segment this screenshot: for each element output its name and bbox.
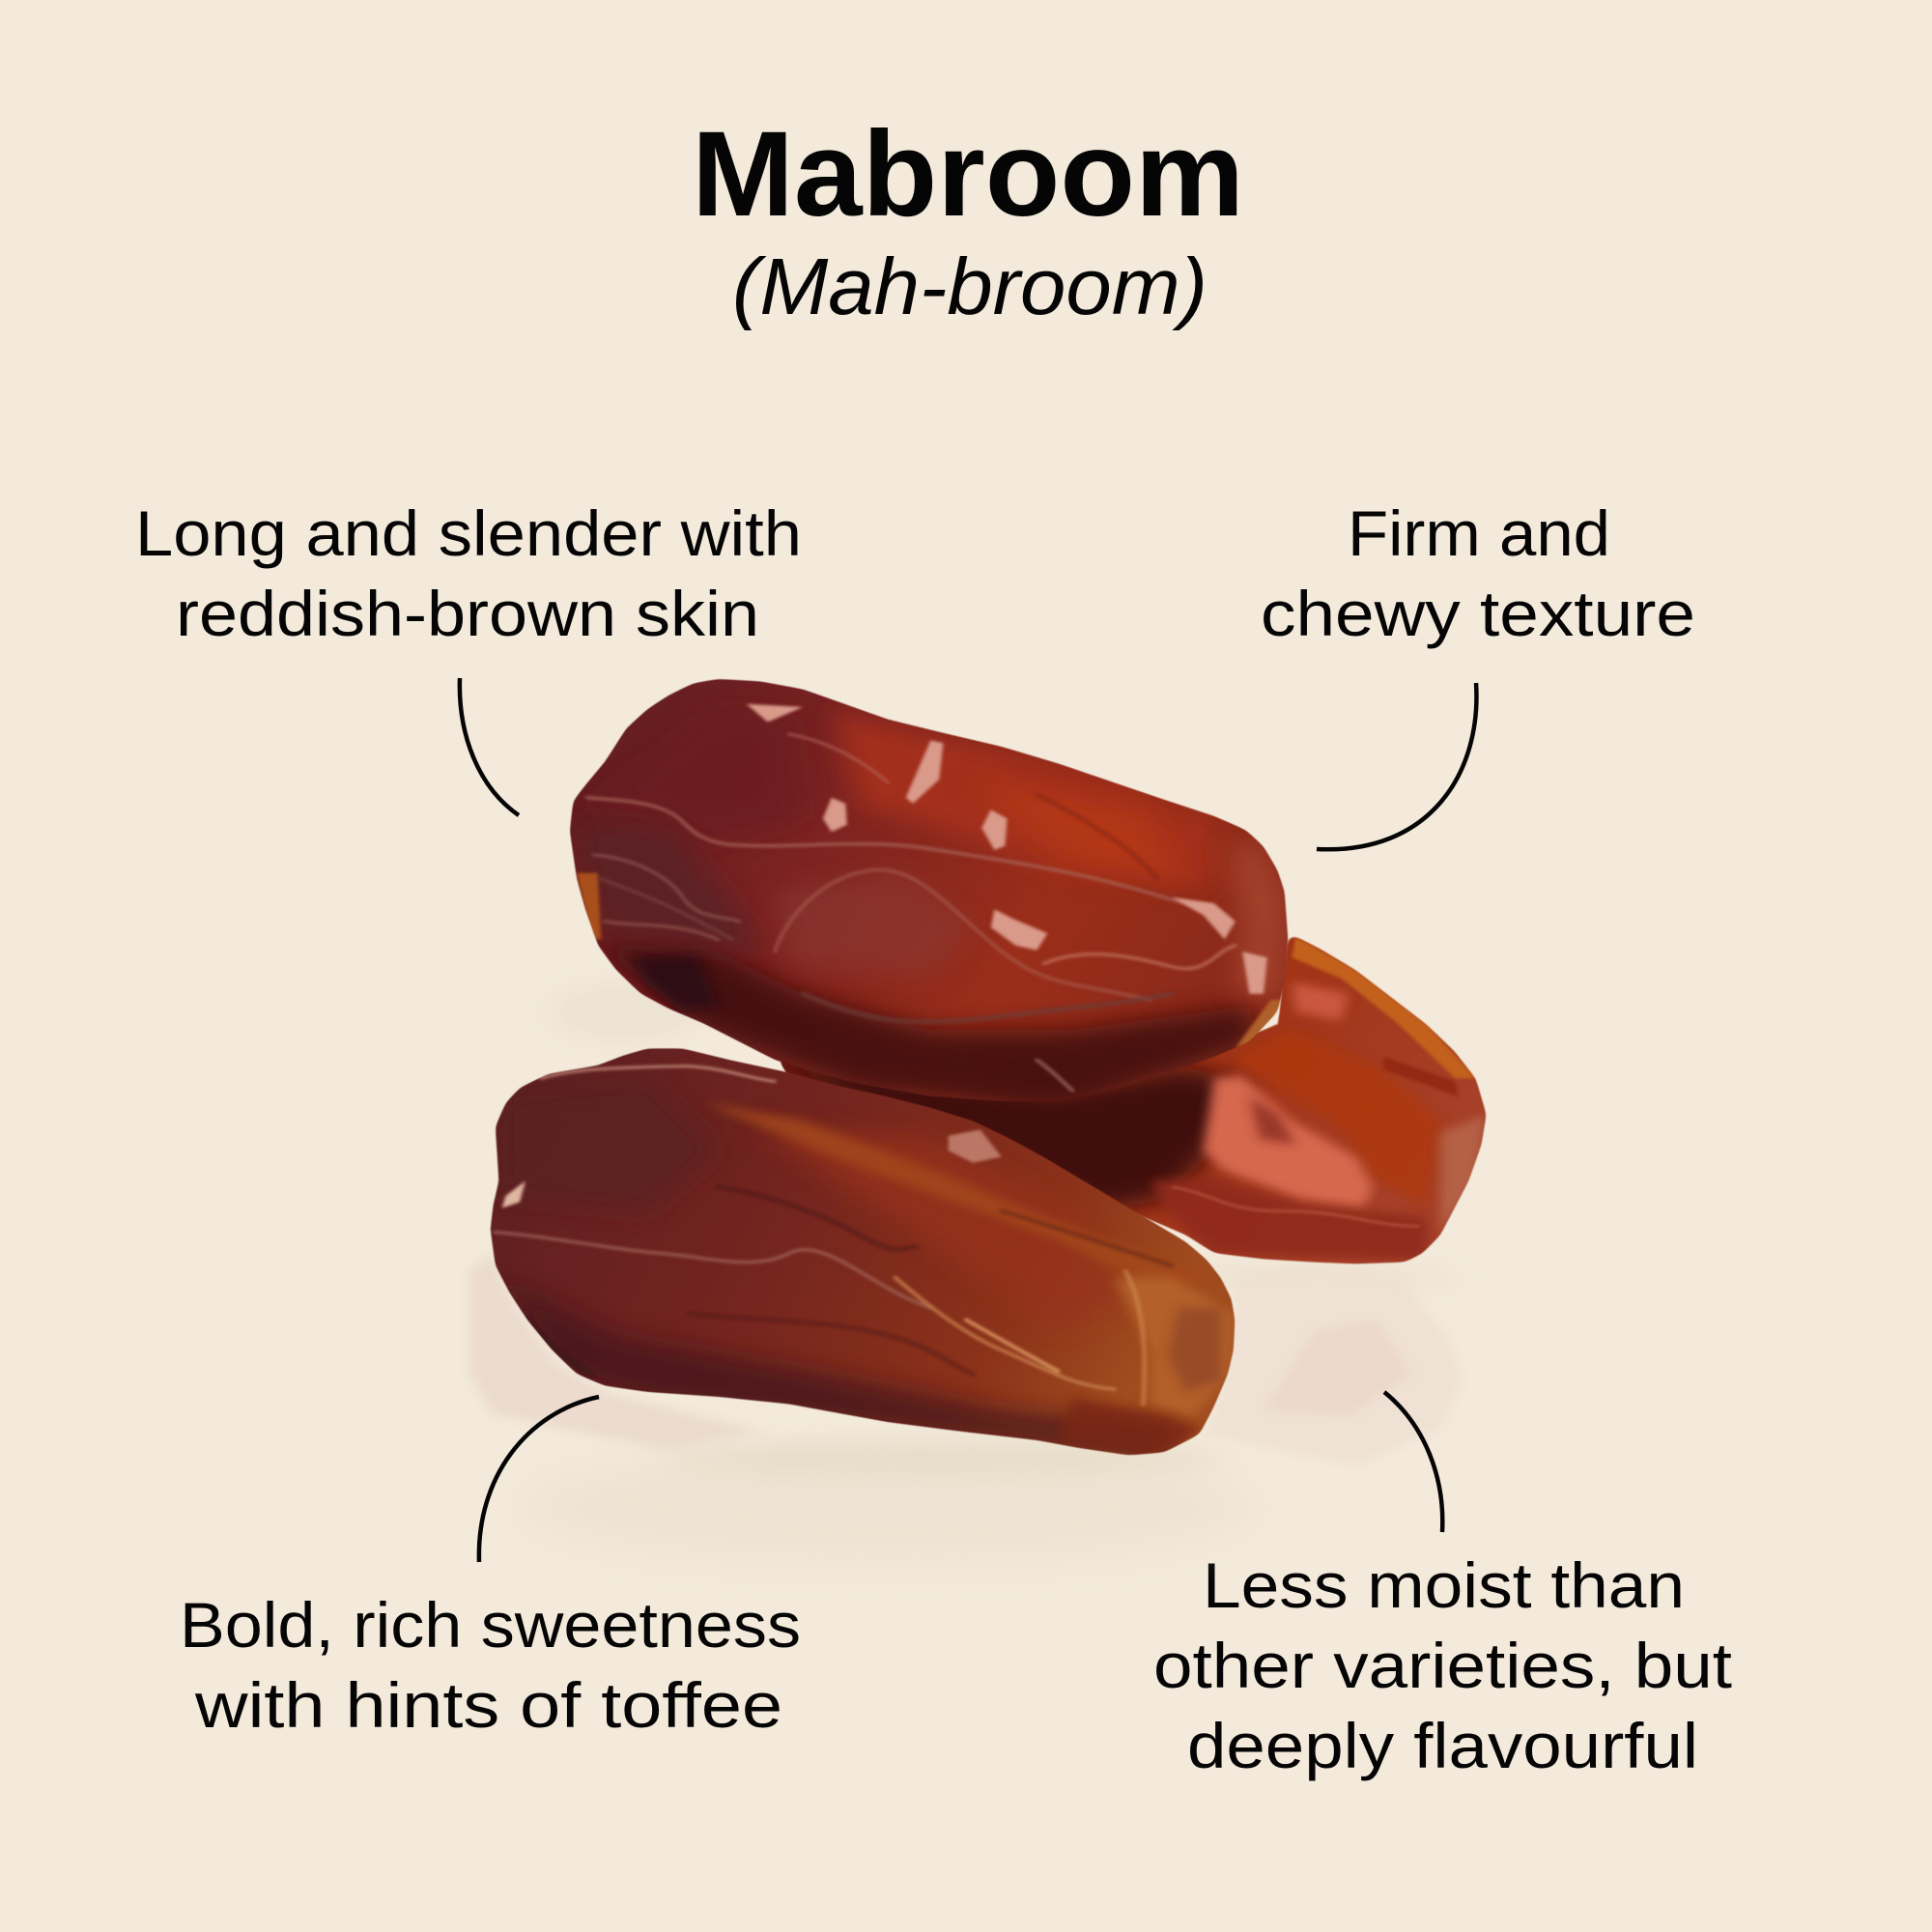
infographic canvas <box>141 128 1731 1781</box>
date: top, wrinkles <box>587 734 1236 1091</box>
date: bottom, golden ridge <box>714 1103 1147 1271</box>
callout text: moisture: other varieties, but <box>1153 1630 1732 1701</box>
curved leader line: moisture <box>1384 1392 1442 1532</box>
curved leader line: flavour <box>479 1397 599 1562</box>
date: back, shadow from top date <box>768 1054 1249 1211</box>
date: top, pale sugar highlights <box>747 704 1267 994</box>
date: bottom front <box>477 1036 1249 1470</box>
curved leader line: appearance <box>460 678 519 815</box>
callout text: flavour: Bold, rich sweetness <box>180 1589 801 1661</box>
callout text: moisture: Less moist than <box>1203 1549 1685 1621</box>
callout text: moisture: deeply flavourful <box>1187 1710 1698 1781</box>
reflection of dates on surface <box>470 1254 1462 1464</box>
soft ground shadow <box>520 981 1462 1567</box>
subtitle: pronunciation: (Mah-broom) <box>732 242 1208 331</box>
callout text: texture <box>1261 497 1695 649</box>
date: top <box>555 668 1306 1115</box>
illustration: three mabroom dates <box>470 668 1512 1567</box>
date: bottom, wrinkles <box>495 1066 1172 1405</box>
date: top, glowing upper surface <box>832 710 1214 891</box>
callout text: texture: Firm and <box>1348 497 1610 569</box>
date: bottom, highlights <box>502 1129 1002 1208</box>
callout text: moisture <box>1153 1549 1732 1781</box>
title: Mabroom <box>692 107 1244 242</box>
curved leader line: texture <box>1317 683 1476 849</box>
callout text: appearance <box>135 497 802 649</box>
callout text: appearance: Long and slender with <box>135 497 802 569</box>
date: back right <box>780 936 1487 1264</box>
date: top, dark underside <box>598 946 1257 1115</box>
callout text: flavour <box>180 1589 801 1741</box>
callout text: flavour: with hints of toffee <box>194 1669 782 1741</box>
date: bottom, dark underside <box>495 1277 1172 1459</box>
callout text: appearance: reddish-brown skin <box>176 578 759 649</box>
callout text: texture: chewy texture <box>1261 578 1695 649</box>
